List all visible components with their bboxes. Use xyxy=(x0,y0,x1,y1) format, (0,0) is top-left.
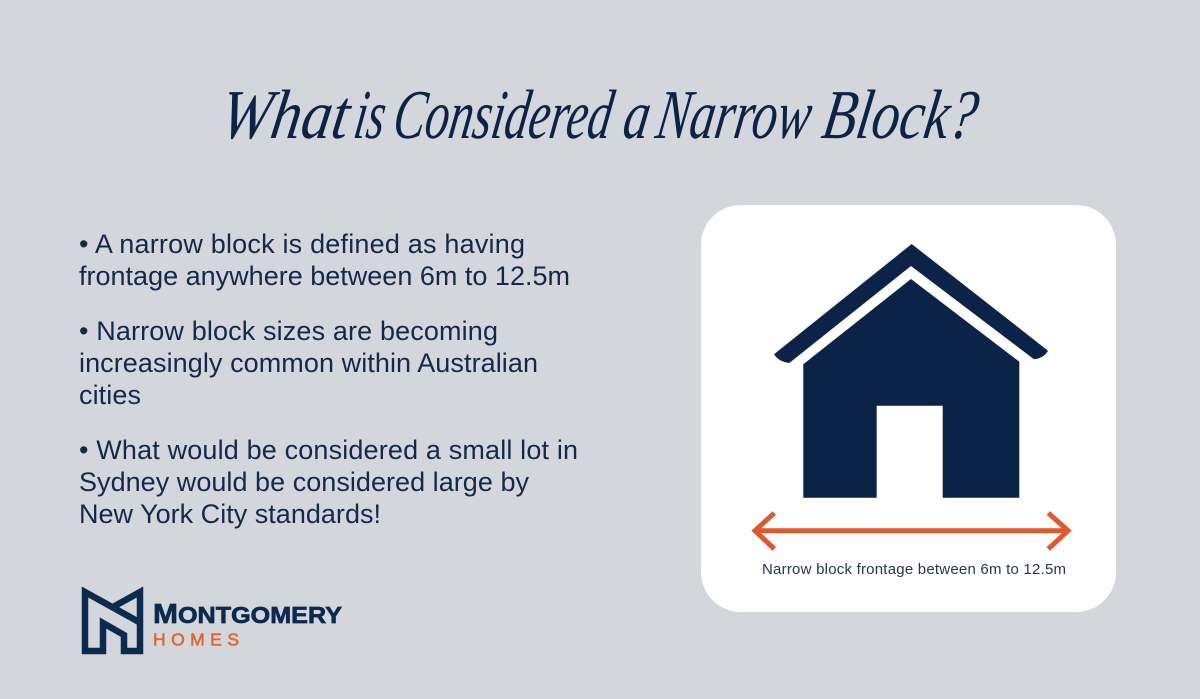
arrow: frontage width xyxy=(755,513,1068,549)
text block: bullet points xyxy=(79,229,578,529)
title: What xyxy=(215,76,357,154)
bullet 2 xyxy=(79,316,538,410)
title: Considered xyxy=(388,76,619,154)
icon: house body xyxy=(803,279,1019,498)
bullet 2: • Narrow block sizes are becoming xyxy=(79,316,498,346)
icon: logo mark xyxy=(85,592,140,651)
logo: Montgomery Homes xyxy=(85,592,342,651)
logo wordmark: MONTGOMERY xyxy=(153,598,342,629)
bullet 3: • What would be considered a small lot in xyxy=(79,435,578,465)
bullet 3 xyxy=(79,435,578,529)
title: Block? xyxy=(817,76,984,154)
title: is xyxy=(349,76,392,154)
title: a xyxy=(618,76,657,154)
caption: Narrow block frontage between 6m to 12.5m xyxy=(762,561,1066,578)
bullet 1 xyxy=(79,229,570,291)
logo subtitle: HOMES xyxy=(153,630,239,650)
bullet 2: increasingly common within Australian xyxy=(79,348,538,378)
bullet 2: cities xyxy=(79,380,141,410)
title: Narrow xyxy=(651,76,818,154)
panel: house illustration xyxy=(701,205,1116,612)
title xyxy=(215,76,984,154)
bullet 1: • A narrow block is defined as having xyxy=(79,229,525,259)
bullet 1: frontage anywhere between 6m to 12.5m xyxy=(79,261,570,291)
icon: house roof xyxy=(774,244,1048,363)
bullet 3: New York City standards! xyxy=(79,499,381,529)
bullet 3: Sydney would be considered large by xyxy=(79,467,530,497)
